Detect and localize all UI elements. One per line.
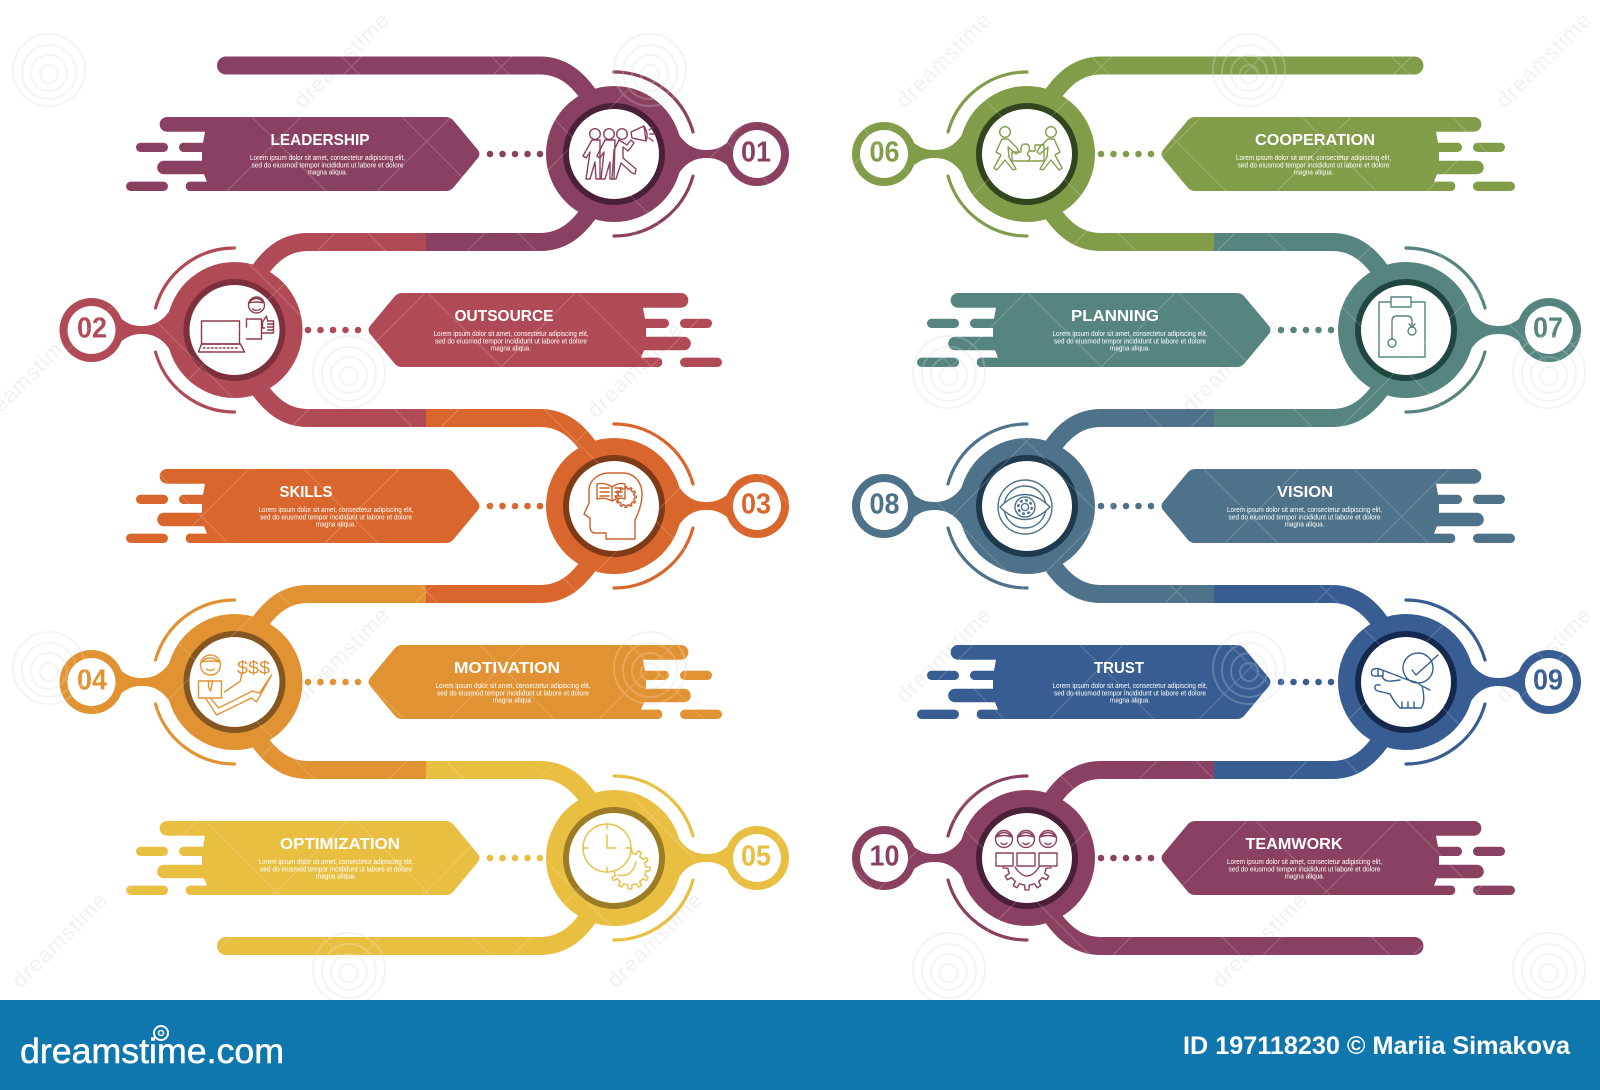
text block: vision	[1227, 507, 1382, 529]
panel: skills	[126, 469, 543, 543]
panel: optimization	[126, 821, 543, 895]
heading: cooperation: COOPERATION	[1255, 132, 1375, 149]
node 04	[60, 600, 302, 764]
panel: teamwork	[1098, 821, 1515, 895]
node 10	[852, 776, 1095, 940]
watermark pattern: dreamstime	[1491, 7, 1597, 113]
text block: cooperation	[1236, 155, 1391, 177]
number 05: 05	[741, 840, 771, 872]
text block: leadership: sed do eiusmod tempor incididunt ut labore et dolore	[252, 162, 404, 169]
text block: skills: sed do eiusmod tempor incididunt ut labore et dolore	[260, 514, 412, 521]
panel: cooperation	[1098, 117, 1515, 191]
text block: motivation	[436, 683, 591, 705]
step 05: optimization	[126, 776, 789, 940]
text block: vision: magna aliqua.	[1284, 522, 1325, 529]
icon: man with rising money chart	[198, 655, 272, 715]
watermark pattern: dreamstime	[1177, 312, 1283, 418]
node 05	[546, 776, 789, 940]
step 02: outsource	[60, 248, 722, 412]
step 06: cooperation	[852, 72, 1515, 236]
heading: planning: PLANNING	[1071, 308, 1159, 325]
icon: eye	[998, 480, 1052, 534]
footer credit: ID 197118230 © Mariia Simakova	[1183, 1032, 1571, 1060]
icon: hand with check mark	[1371, 653, 1438, 708]
text block: optimization: magna aliqua.	[316, 874, 356, 881]
text block: vision: Lorem ipsum dolor sit amet, consectetur adipiscing elit,	[1227, 507, 1382, 514]
heading: outsource: OUTSOURCE	[454, 308, 554, 325]
number 08: 08	[870, 488, 900, 520]
watermark pattern: dreamstime	[289, 7, 395, 113]
panel: trust	[917, 645, 1334, 719]
text block: leadership: Lorem ipsum dolor sit amet, consectetur adipiscing elit,	[250, 155, 405, 162]
panel: leadership	[126, 117, 543, 191]
text block: skills: Lorem ipsum dolor sit amet, consectetur adipiscing elit,	[258, 507, 414, 514]
watermark pattern: dreamstime	[289, 602, 395, 708]
text block: trust: magna aliqua.	[1110, 698, 1150, 705]
text block: trust: sed do eiusmod tempor incididunt ut labore et dolore	[1054, 690, 1206, 697]
panel: outsource	[305, 293, 722, 367]
text block: skills	[258, 507, 414, 529]
heading: trust: TRUST	[1094, 660, 1144, 677]
text block: optimization	[258, 859, 414, 881]
text block: cooperation: sed do eiusmod tempor incididunt ut labore et dolore	[1238, 162, 1390, 169]
heading: skills: SKILLS	[280, 484, 333, 501]
node 01	[546, 72, 789, 236]
text block: outsource: magna aliqua.	[491, 346, 531, 353]
connector track: left column	[226, 66, 592, 946]
heading: leadership: LEADERSHIP	[270, 132, 370, 149]
number 10: 10	[870, 840, 900, 872]
number 04: 04	[77, 664, 107, 696]
step 10: teamwork	[852, 776, 1515, 940]
text block: skills: magna aliqua.	[316, 522, 356, 529]
text block: cooperation: Lorem ipsum dolor sit amet, consectetur adipiscing elit,	[1236, 155, 1391, 162]
node 08	[852, 424, 1095, 588]
text block: planning	[1052, 331, 1208, 353]
text block: leadership: magna aliqua.	[308, 170, 348, 177]
node 06	[852, 72, 1095, 236]
icon: team with megaphone	[583, 126, 655, 179]
panel: planning	[917, 293, 1334, 367]
step 08: vision	[852, 424, 1515, 588]
watermark pattern: dreamstime	[602, 887, 708, 993]
text block: trust: Lorem ipsum dolor sit amet, consectetur adipiscing elit,	[1052, 683, 1208, 690]
node 02	[60, 248, 302, 412]
text block: leadership	[250, 155, 405, 177]
node 07	[1338, 248, 1581, 412]
heading: teamwork: TEAMWORK	[1246, 836, 1343, 853]
text block: outsource: sed do eiusmod tempor incididunt ut labore et dolore	[435, 338, 587, 345]
step 09: trust	[917, 600, 1581, 764]
number 06: 06	[870, 136, 900, 168]
text block: teamwork: magna aliqua.	[1284, 874, 1325, 881]
footer bar	[0, 1000, 1600, 1090]
text block: planning: sed do eiusmod tempor incididunt ut labore et dolore	[1054, 338, 1206, 345]
icon: man with rising money chart: $$$	[237, 658, 270, 678]
number 03: 03	[741, 488, 771, 520]
text block: cooperation: magna aliqua.	[1294, 170, 1334, 177]
text block: teamwork: Lorem ipsum dolor sit amet, consectetur adipiscing elit,	[1227, 859, 1382, 866]
text block: optimization: Lorem ipsum dolor sit amet, consectetur adipiscing elit,	[258, 859, 414, 866]
step 07: planning	[917, 248, 1581, 412]
text block: teamwork: sed do eiusmod tempor incididunt ut labore et dolore	[1228, 866, 1381, 873]
icon: head with book and gear	[584, 473, 642, 539]
text block: vision: sed do eiusmod tempor incididunt ut labore et dolore	[1228, 514, 1381, 521]
node 09	[1338, 600, 1581, 764]
step 01: leadership	[126, 72, 789, 236]
text block: outsource: Lorem ipsum dolor sit amet, consectetur adipiscing elit,	[434, 331, 589, 338]
node 03	[546, 424, 789, 588]
text block: outsource	[434, 331, 589, 353]
heading: vision: VISION	[1277, 484, 1333, 501]
number 01: 01	[741, 136, 771, 168]
heading: motivation: MOTIVATION	[454, 660, 560, 677]
icon: clock and gear	[583, 824, 650, 889]
panel: motivation	[305, 645, 722, 719]
text block: motivation: magna aliqua.	[493, 698, 533, 705]
watermark pattern: dreamstime	[582, 317, 688, 423]
text block: trust	[1052, 683, 1208, 705]
icon: team above gear	[991, 830, 1063, 890]
text block: teamwork	[1227, 859, 1382, 881]
text block: motivation: sed do eiusmod tempor incididunt ut labore et dolore	[437, 690, 589, 697]
step 03: skills	[126, 424, 789, 588]
step 04: motivation	[60, 600, 722, 764]
number 02: 02	[77, 312, 107, 344]
icon: laptop and worker	[198, 297, 274, 352]
heading: optimization: OPTIMIZATION	[280, 836, 400, 853]
connector track: right column	[1049, 66, 1414, 946]
text block: planning: Lorem ipsum dolor sit amet, consectetur adipiscing elit,	[1052, 331, 1208, 338]
watermark pattern: dreamstime	[1207, 887, 1313, 993]
watermark pattern: dreamstime	[7, 887, 113, 993]
text block: planning: magna aliqua.	[1110, 346, 1150, 353]
icon: two people joining puzzle	[994, 127, 1062, 170]
panel: vision	[1098, 469, 1515, 543]
number 07: 07	[1533, 312, 1563, 344]
watermark pattern: dreamstime	[891, 7, 997, 113]
footer logo: dreamstime: dreamstime.com	[20, 1032, 284, 1071]
watermark pattern: dreamstime	[891, 602, 997, 708]
text block: optimization: sed do eiusmod tempor incididunt ut labore et dolore	[260, 866, 412, 873]
number 09: 09	[1533, 664, 1563, 696]
text block: motivation: Lorem ipsum dolor sit amet, consectetur adipiscing elit,	[436, 683, 591, 690]
icon: clipboard with plan	[1379, 297, 1425, 357]
watermark pattern: dreamstime	[1491, 602, 1597, 708]
